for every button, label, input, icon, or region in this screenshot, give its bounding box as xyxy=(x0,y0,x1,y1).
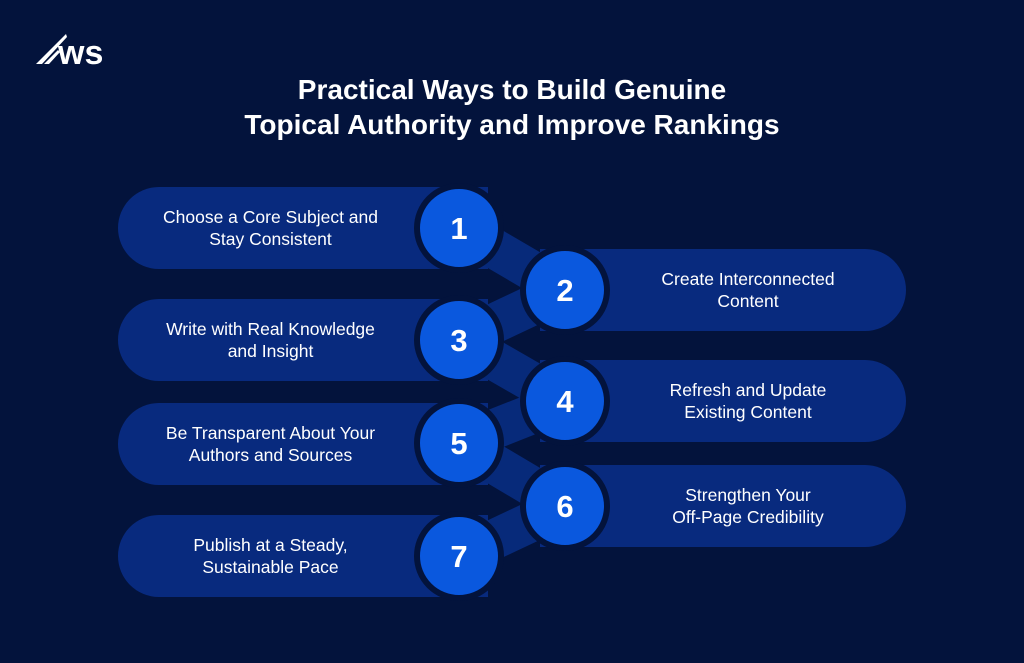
pill 7: Publish at a Steady, xyxy=(193,535,348,555)
pill 4 xyxy=(540,360,906,442)
pill 6: Off-Page Credibility xyxy=(672,507,824,527)
pill 7: Sustainable Pace xyxy=(202,557,339,577)
circle 5 xyxy=(417,401,501,485)
circle 1 xyxy=(417,186,501,270)
circle 3: 3 xyxy=(450,323,468,358)
circle 7: 7 xyxy=(450,539,468,574)
circle 1: 1 xyxy=(450,211,468,246)
circle 2: 2 xyxy=(556,273,574,308)
circle 4 xyxy=(523,359,607,443)
circle 6: 6 xyxy=(556,489,574,524)
circle 2 xyxy=(523,248,607,332)
pill 3: Write with Real Knowledge xyxy=(166,319,375,339)
pill 5 xyxy=(118,403,488,485)
circle 3 xyxy=(417,298,501,382)
circle 7 xyxy=(417,514,501,598)
circle 4: 4 xyxy=(556,384,574,419)
title: Practical Ways to Build Genuine xyxy=(298,74,726,105)
pill 5: Be Transparent About Your xyxy=(166,423,375,443)
pill 1: Choose a Core Subject and xyxy=(163,207,378,227)
pill 7 xyxy=(118,515,488,597)
pill 1 xyxy=(118,187,488,269)
logo xyxy=(36,34,103,70)
pill 1: Stay Consistent xyxy=(209,229,332,249)
pill 2: Create Interconnected xyxy=(661,269,835,289)
pill 5: Authors and Sources xyxy=(189,445,352,465)
pill 6: Strengthen Your xyxy=(685,485,811,505)
pill 4: Refresh and Update xyxy=(670,380,826,400)
circle 5: 5 xyxy=(450,426,468,461)
pill 4: Existing Content xyxy=(684,402,812,422)
title xyxy=(244,74,780,140)
circle 6 xyxy=(523,464,607,548)
pill 2 xyxy=(540,249,906,331)
pill 6 xyxy=(540,465,906,547)
title: Topical Authority and Improve Rankings xyxy=(244,109,780,140)
pill 3: and Insight xyxy=(228,341,313,361)
pill 3 xyxy=(118,299,488,381)
pill 2: Content xyxy=(717,291,779,311)
